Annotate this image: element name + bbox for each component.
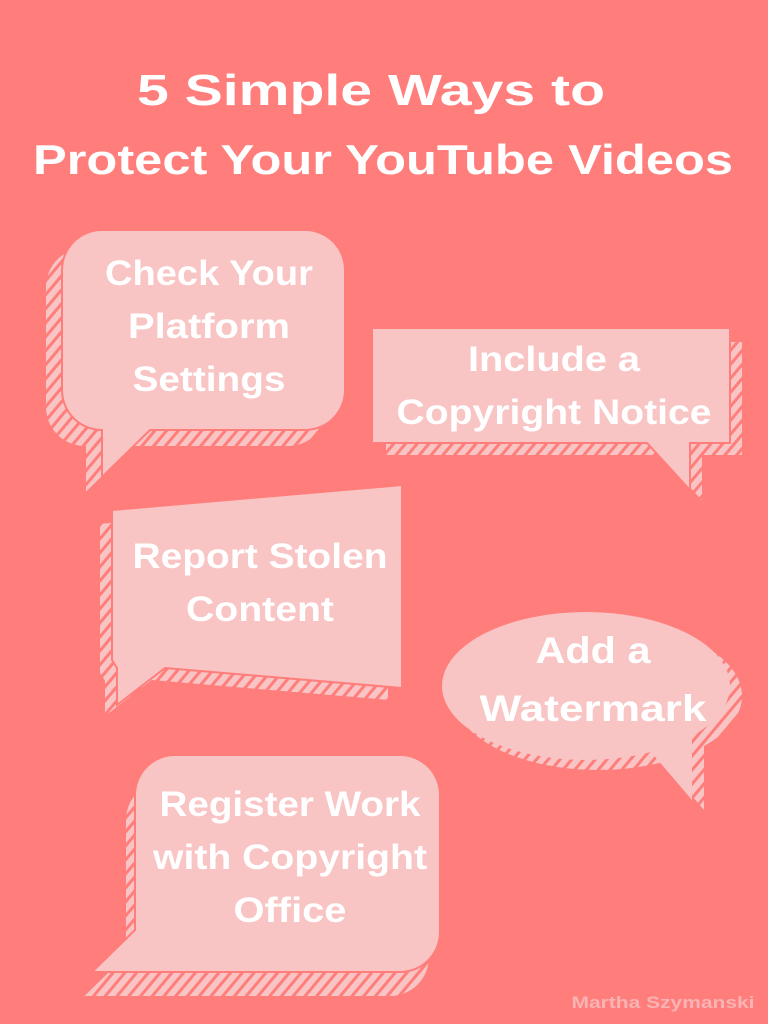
text: add a watermark: Watermark — [480, 688, 707, 729]
text: include a copyright notice: Include a — [468, 340, 641, 379]
text: report stolen content: Report Stolen — [132, 537, 388, 576]
credit: Martha Szymanski — [572, 993, 754, 1012]
title: Protect Your YouTube Videos — [33, 136, 733, 183]
text: check your platform settings: Check Your — [105, 254, 313, 293]
text: register work with copyright office: with Copyright — [152, 838, 427, 877]
bubble: register work with copyright office — [82, 755, 440, 997]
title: 5 Simple Ways to — [137, 66, 605, 115]
text: register work with copyright office: Office — [234, 891, 346, 930]
bubble: check your platform settings — [45, 230, 345, 494]
text: include a copyright notice: Copyright Notice — [396, 393, 712, 432]
title — [33, 66, 733, 183]
bubble: include a copyright notice — [372, 328, 743, 503]
text: check your platform settings: Settings — [132, 360, 286, 399]
text: check your platform settings: Platform — [128, 307, 290, 346]
bubble: report stolen content — [99, 485, 402, 718]
text: report stolen content: Content — [186, 590, 334, 629]
text: register work with copyright office: Register Work — [160, 785, 421, 824]
bubble: add a watermark — [442, 612, 742, 810]
text: add a watermark: Add a — [536, 630, 651, 671]
